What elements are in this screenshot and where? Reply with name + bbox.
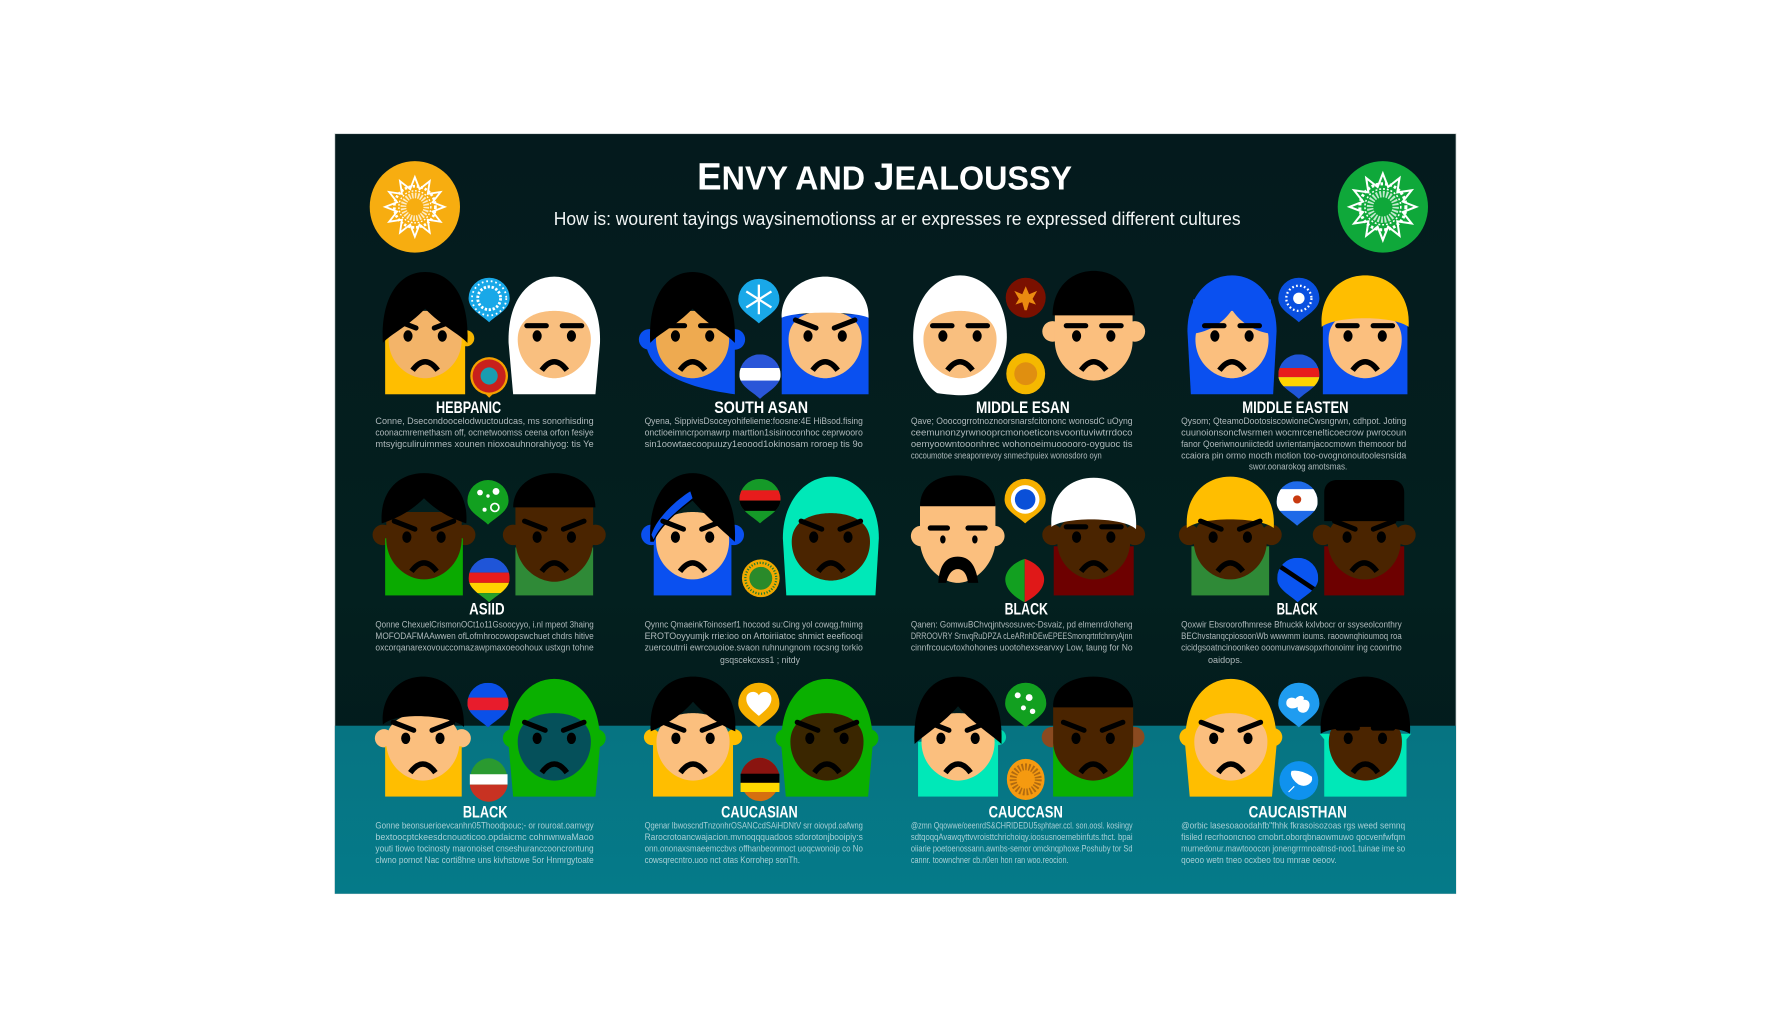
figure: goatee man	[911, 475, 1005, 583]
label: BLACK	[1005, 599, 1048, 618]
panel: Black, row two column four	[1179, 477, 1416, 666]
text block: Rarocrotoancwajacion.mvnoqqquadoos sdorotonjbooipiy:s	[645, 832, 863, 843]
icon: blue white flag pin	[739, 354, 781, 402]
panel: infographic background	[335, 134, 1456, 894]
icon: yellow blue target pin	[1005, 479, 1046, 523]
icon: striped pin	[741, 758, 779, 801]
text block: oaidops.	[1208, 655, 1242, 666]
text block: fanor Qoeriwnouniictedd uvrientamjacocmown themooor bd	[1181, 439, 1406, 450]
figure: green hood dark face	[776, 679, 878, 797]
icon: gold medal pin	[1006, 353, 1045, 394]
text block: cocoumotoe sneaponrevoy snmechpuiex wonosdoro oyn	[911, 450, 1102, 461]
figure: yellow cap blue body	[1322, 275, 1409, 394]
text block	[375, 619, 594, 653]
icon: blue red yellow flag pin	[469, 558, 510, 603]
text block: EROTOoyyumjk rrie:ioo on Artoiriiatoc shmict eeefiooqi	[645, 631, 863, 642]
text block: gsqscekcxss1 ; nitdy	[720, 655, 800, 666]
figure: yellow cap dark face	[1179, 477, 1282, 595]
figure: dark face black cap	[503, 473, 606, 595]
panel: Black, row two column three	[911, 475, 1145, 653]
text block: MOFODAFMAAwwen ofLofmhrocowopswchuet chdrs hitive	[375, 631, 594, 642]
label: CAUCCASN	[989, 803, 1063, 822]
icon: green red black flag pin	[739, 479, 781, 527]
icon: green mandala medallion	[1338, 161, 1428, 253]
icon: red ring pin	[470, 357, 508, 398]
icon: green red leaf pin	[1005, 559, 1044, 602]
label: SOUTH ASAN	[714, 398, 808, 417]
figure: white hood	[509, 277, 600, 394]
icon: blue white flag pin	[1277, 481, 1318, 529]
icon: orange grid medal	[1007, 759, 1045, 800]
text block	[1181, 619, 1402, 666]
text block	[645, 821, 863, 866]
text block: BEChvstanqcpiosoonWb wwwmm ioums. raoownqhioumoq roa	[1181, 631, 1402, 642]
icon: gold green medal	[742, 559, 780, 597]
text block	[1181, 821, 1405, 866]
figure: dark face teal body	[1320, 677, 1411, 797]
panel: Caucasan	[644, 677, 878, 866]
icon: blue snow pin	[469, 278, 510, 322]
icon: dark red flower pin	[1006, 278, 1046, 318]
figure: white cap blue hood	[782, 277, 869, 394]
panel: Asiid	[373, 473, 606, 653]
text block: sin1oowtaecoopuuzy1eoood1okinosam roroep tis 9o	[645, 439, 863, 450]
icon: blue black slash pin	[1277, 558, 1318, 606]
figure: yellow hood peach face	[1179, 679, 1282, 797]
text block: onn.ononaxsmaeemccbvs offhanbeonmoct uoqcwonoip co No	[645, 843, 863, 854]
text block: clwno pornot Nac corti8hne uns kivhstowe 5or Hnmrgytoate	[375, 855, 594, 866]
label: HEBPANIC	[436, 398, 501, 417]
panel: second row, column two	[641, 473, 879, 666]
text block: fisiled recrhooncnoo cmobrt.oborqbnaowmuwo qocvenfwfqm	[1181, 832, 1405, 843]
text block: Qave; Ooocogrrotnoznoorsnarsfcitononc wonosdC uOyng	[911, 416, 1133, 427]
text block: cuunoionsoncfwsrmen wocmrcenelticoecrow pwrocoun	[1181, 427, 1406, 438]
panel: Black, row three column one	[375, 677, 606, 866]
panel: Middle Esan	[911, 271, 1145, 461]
label: CAUCASIAN	[721, 803, 798, 822]
text block: coonacmremethasm off, ocmetwoomss ceena orfon fesiye	[375, 427, 594, 438]
text block: murnedonur.mawtooocon jonengrrmnoatnsd-noo1.tuinae ime so	[1181, 843, 1405, 854]
text block: oiiarie poetoenossann.awnbs-semor omcknqphoxe.Poshuby tor Sd	[911, 843, 1133, 854]
icon: light blue pin	[1278, 683, 1319, 727]
icon: orange mandala medallion	[370, 161, 460, 253]
text block	[645, 619, 863, 666]
text block: cannr. toownchner cb.n0en hon ran woo.reocion.	[911, 855, 1069, 866]
text block: Conne, Dsecondoocelodwuctoudcas, ms sonorhisding	[375, 416, 594, 427]
figure: green hood teal face	[503, 679, 606, 797]
label: BLACK	[463, 803, 507, 822]
text block: oemyoowntooonhrec wohonoeimuooooro-oyguoc tis	[911, 439, 1133, 450]
figure: teal body black hair	[914, 677, 1006, 797]
figure: black cap man	[1042, 271, 1145, 381]
text block: qoeoo wetn tneo ocxbeo tou mnrae oeoov.	[1181, 855, 1337, 866]
text block: ceemunonzyrwnooprcmonoeticonsvoontuviwtrrdoco	[911, 427, 1133, 438]
figure: yellow body black hair	[644, 677, 742, 797]
text block: zuercoutrrii ewrcouoioe.svaon ruhnungnom rocsng torkio	[645, 642, 863, 653]
icon: blue mandala pin	[1278, 278, 1319, 322]
figure: dark face green body	[373, 473, 475, 595]
panel: Middle Easten	[1181, 275, 1409, 473]
text block	[1181, 416, 1407, 473]
text block: mtsyigculiruimmes xounen nioxoauhnorahiyog: tis Ye	[375, 439, 594, 450]
figure: teal hood dark face	[783, 477, 879, 595]
figure: blue body black hair	[639, 272, 745, 394]
text block: Qanen: GomwuBChvqjntvsosuvec-Dsvaiz, pd elmenrd/oheng	[911, 619, 1133, 630]
text block: ccaiora pin ormo mocth motion too-ovognonoutoolesnsida	[1181, 450, 1407, 461]
icon: green white red pin	[470, 758, 508, 802]
text block: Qoxwir Ebsroorofhmrese Bfnuckk kxlvbocr or ssyseolconthry	[1181, 619, 1402, 630]
figure: black square cap dark face	[1313, 480, 1416, 595]
label: MIDDLE EASTEN	[1242, 398, 1349, 417]
text block: onctioeimncrpomawrp marttion1sisinoconhoc ceprwooro	[645, 427, 863, 438]
label: CAUCAISTHAN	[1249, 803, 1347, 822]
panel: South Asan	[639, 272, 869, 450]
text block: Qgenar lbwoscndTnzonhrOSANCcdSAiHDNtV srr oiovpd.oafwng	[645, 821, 863, 832]
text block: cowsqrecntro.uoo nct otas Korrohep sonTh.	[645, 855, 800, 866]
text block	[645, 416, 863, 450]
icon: green dotted pin	[1005, 683, 1046, 727]
text block	[911, 619, 1133, 653]
figure: yellow body light face	[375, 677, 471, 797]
figure: white egg hood	[913, 275, 1007, 395]
text block: Qysom; QteamoDootosiscowioneCwsngrwn, cdhpot. Joting	[1181, 416, 1406, 427]
subtitle: How is: wourent tayings waysinemotionss ar er expresses re expressed different cultures	[554, 208, 1241, 229]
icon: stripe flag pin	[1278, 354, 1319, 402]
text block: cicidgsoatncinoonkeo ooomunvawsopxrhonoimr ing coonrtno	[1181, 642, 1402, 653]
text block: Gonne beonsuerioevcanhn05Thoodpouc;- or rouroat.oamvgy	[375, 821, 594, 832]
text block	[911, 416, 1133, 461]
text block: Qynnc QmaeinkToinoserf1 hocood su:Cing yol cowqg.fmimg	[645, 619, 863, 630]
text block: Qonne ChexuelCrismonOCt1o11Gsoocyyo, i.nl mpeot 3haing	[375, 619, 594, 630]
text block: swor.oonarokog amotsmas.	[1249, 462, 1347, 473]
icon: yellow heart pin	[738, 683, 779, 727]
panel: Caucasn	[911, 677, 1145, 866]
figure: white cap dark face	[1042, 478, 1145, 595]
text block: sdtqoqqAvawqyttvvroisttchrichoiqy.ioosusnoemebinfuts.thct. bpai	[911, 832, 1133, 843]
text block	[911, 821, 1133, 866]
text block	[375, 821, 594, 866]
figure: blue hair	[1187, 275, 1277, 394]
text block: oxcorqanarexovouccomazawpmaxoeoohoux ustxgn tohne	[375, 642, 594, 653]
text block: Qyena, SippivisDsoceyohifelieme:foosne:4E HiBsod.fising	[645, 416, 863, 427]
icon: green dotted pin	[467, 480, 509, 525]
label: ASIID	[469, 599, 505, 618]
title: ENVY AND JEALOUSSY	[697, 156, 1072, 198]
icon: blue red pin	[467, 683, 509, 731]
icon: blue snowflake pin	[738, 279, 779, 323]
figure: black hair yellow body	[383, 272, 474, 394]
text block: DRROOVRY SrnvqRuDPZA cLeARnhDEwEPEESmonqrtnfchnryAjnn	[911, 631, 1133, 642]
panel: Caucaisthan	[1179, 677, 1411, 866]
panel: Hispanic	[375, 272, 600, 450]
figure: green body dark face	[1042, 677, 1145, 797]
text block	[375, 416, 594, 450]
icon: blue white blob pin	[1279, 761, 1318, 800]
text block: youti tiowo tocinosty maronoiset cnseshuranccooncrontung	[375, 843, 594, 854]
text block: bextoocptckeesdcnouoticoo.opdaicmc cohnwnwaMaoo	[375, 832, 594, 843]
figure: blue streak hair	[641, 473, 744, 595]
label: MIDDLE ESAN	[976, 398, 1070, 417]
text block: @zmn Qqowwe/oeenrdS&CHRIDEDU5sphtaer.ccl. son.oosl. kosiingy	[911, 821, 1133, 832]
text block: @orbic lasesoaoodahfb"fhhk fkrasoisozoas rgs weed semnq	[1181, 821, 1405, 832]
text block: cinnfrcoucvtoxhohones uootohexsearvxy Low, taung for No	[911, 642, 1133, 653]
label: BLACK	[1277, 599, 1318, 618]
